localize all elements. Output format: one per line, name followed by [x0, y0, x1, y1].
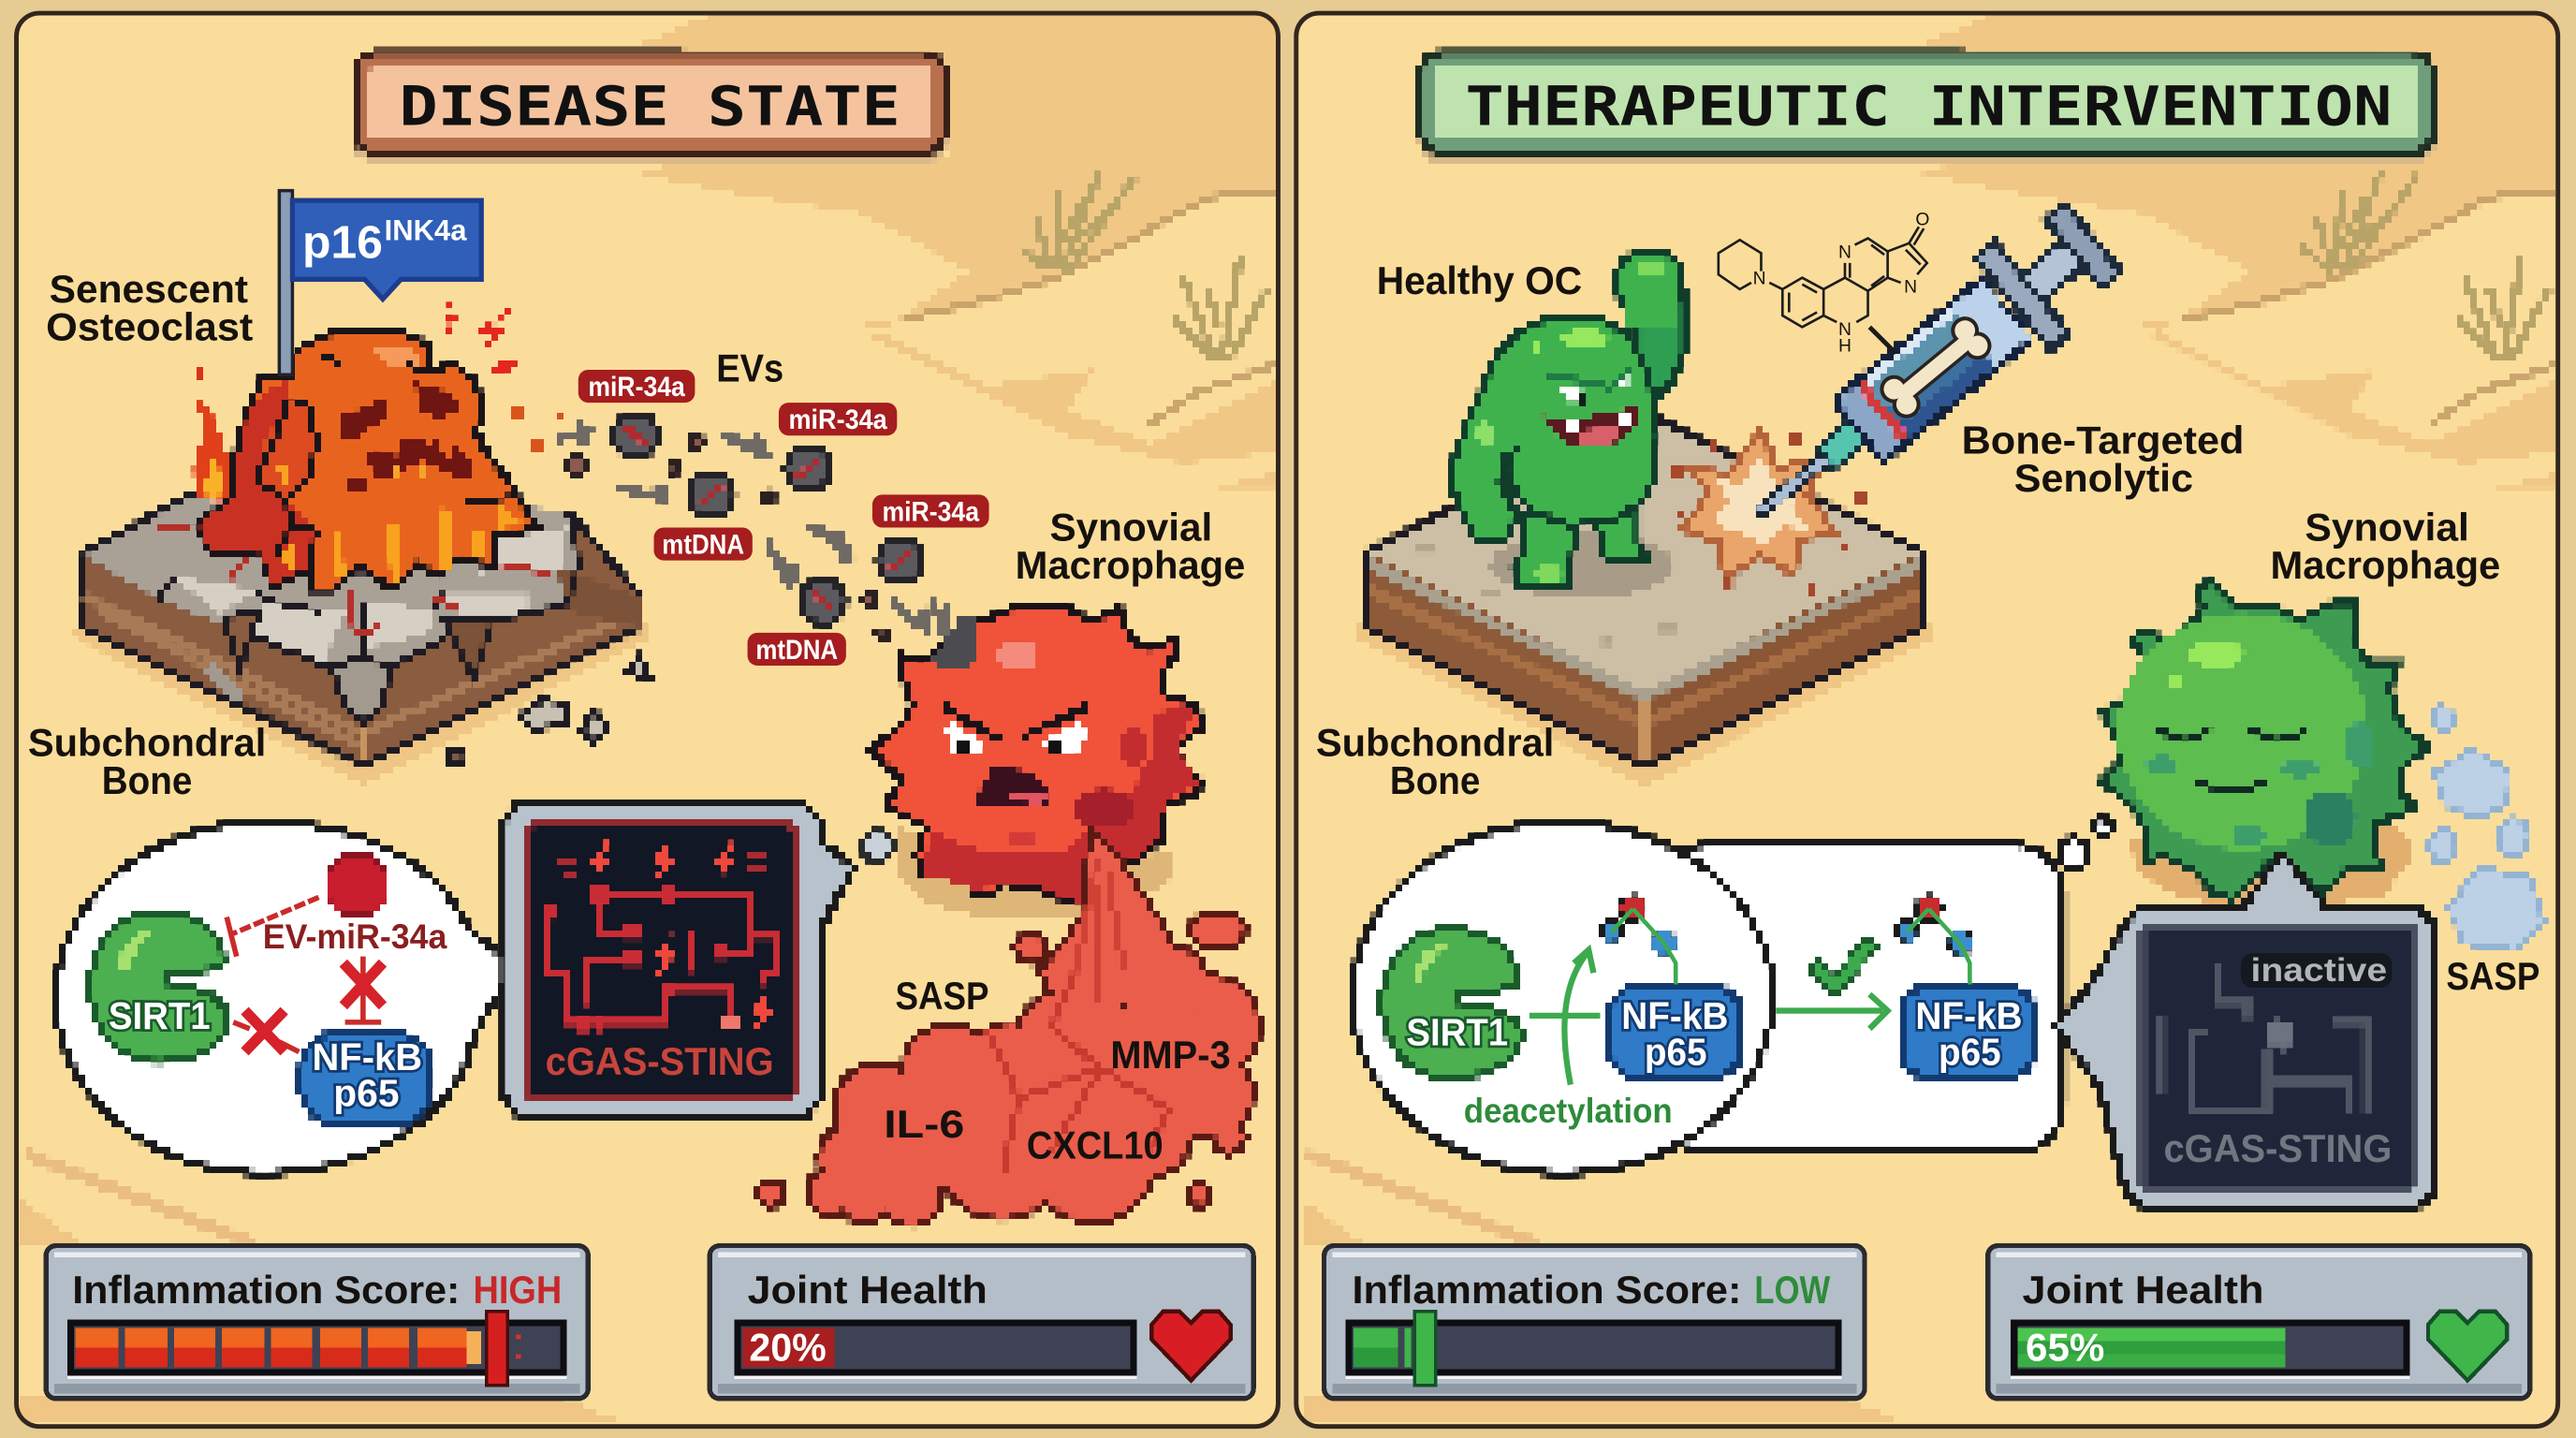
label: bone-targeted senolytic	[1962, 418, 2244, 500]
icon: EV-miR-34a stop sign	[329, 855, 386, 916]
label: senescent osteoclast: Senescent	[50, 267, 248, 311]
healthy osteoclast character	[1454, 255, 1684, 587]
deacetylation arrows	[1530, 950, 1888, 1085]
tag: mtDNA: mtDNA	[755, 635, 838, 666]
EV debris	[567, 435, 887, 639]
label: SASP: SASP	[896, 974, 989, 1018]
speech bubble: SIRT1 blocked	[56, 822, 516, 1173]
senescent osteoclast lava monster	[196, 330, 537, 590]
label: NF-kB p65 left: NF-kB	[1621, 994, 1728, 1037]
gauge: inflammation score high	[46, 1246, 588, 1399]
label: NF-kB p65: p65	[333, 1071, 399, 1114]
gauge value: 20%: 20%	[749, 1325, 827, 1369]
isometric subchondral bone, cracked	[74, 461, 651, 785]
label: deacetylation: deacetylation	[1464, 1092, 1673, 1130]
therapy labels	[1316, 74, 2539, 1369]
speech bubble: deacetylation	[1352, 822, 2063, 1173]
label: cGAS-STING: cGAS-STING	[546, 1039, 774, 1083]
cGAS-STING monitor: inactive	[2056, 853, 2433, 1210]
chemical structure of senolytic: N	[1904, 277, 1917, 297]
label: subchondral bone: Bone	[102, 758, 192, 802]
flame	[194, 368, 233, 503]
panel: therapeutic intervention	[1296, 13, 2558, 1427]
label: IL-6: IL-6	[884, 1102, 964, 1146]
label: subchondral bone	[28, 720, 266, 802]
label: synovial macrophage: Synovial	[1050, 506, 1212, 550]
label: subchondral bone: Subchondral	[28, 720, 266, 764]
gauge text: joint health: Joint Health	[748, 1268, 988, 1312]
label: SIRT1: SIRT1	[1406, 1010, 1508, 1053]
label: synovial macrophage	[2271, 506, 2500, 587]
label: subchondral bone	[1316, 720, 1554, 802]
panel frame: therapy	[1296, 13, 2558, 1427]
gauge text: inflammation high: HIGH	[473, 1268, 562, 1312]
label: healthy OC: Healthy OC	[1377, 258, 1582, 302]
label: SASP: SASP	[2446, 954, 2539, 998]
label: EVs: EVs	[716, 345, 783, 389]
icon: acetyl groups	[1601, 896, 1972, 956]
icon: NF-kB p65	[300, 1032, 432, 1125]
chemical structure of senolytic: N	[1838, 243, 1852, 263]
label: SIRT1: SIRT1	[109, 994, 211, 1037]
tag: miR-34a: miR-34a	[882, 496, 979, 527]
burst impact	[1673, 431, 1866, 594]
label: NF-kB p65 right: NF-kB	[1915, 994, 2023, 1037]
desert dunes	[1301, 17, 2556, 1423]
title banner shape	[1418, 50, 2437, 163]
gauge text: inflammation low: LOW	[1754, 1268, 1830, 1312]
flag: p16 INK4a	[279, 191, 481, 374]
lightning sparks	[440, 299, 520, 374]
flag: p16 INK4a: p16	[302, 218, 383, 269]
label: CXCL10: CXCL10	[1027, 1123, 1164, 1167]
label: senescent osteoclast	[46, 267, 253, 348]
chemical structure of senolytic: H	[1838, 337, 1852, 357]
SASP plume and cytokine cloud	[755, 837, 1257, 1223]
title banner shape	[352, 50, 948, 163]
gauge value: 65%: 65%	[2026, 1325, 2104, 1369]
label: NF-kB p65 left: p65	[1645, 1031, 1707, 1074]
label: bone-targeted senolytic: Bone-Targeted	[1962, 418, 2244, 462]
icon: NF-kB p65 activated	[1901, 986, 2036, 1078]
label: synovial macrophage: Macrophage	[2271, 543, 2500, 587]
label: synovial macrophage	[1016, 506, 1245, 587]
syringe	[1722, 192, 2130, 558]
gauge: inflammation score low	[1325, 1246, 1865, 1399]
SASP vapour clouds, faded	[2430, 707, 2543, 950]
label: NF-kB p65	[312, 1035, 422, 1114]
tag: miR-34a: miR-34a	[788, 404, 887, 435]
heading: therapeutic intervention: THERAPEUTIC INTERVENTION	[1466, 74, 2392, 138]
icon: SIRT1 enzyme	[91, 912, 227, 1062]
chemical structure of senolytic: N	[1753, 270, 1766, 289]
label: NF-kB p65 right: p65	[1939, 1031, 2001, 1074]
label: MMP-3: MMP-3	[1110, 1033, 1231, 1077]
flag: p16 INK4a: INK4a	[385, 213, 467, 246]
panel frame: disease	[17, 13, 1278, 1427]
label: senescent osteoclast: Osteoclast	[46, 304, 253, 348]
label: synovial macrophage: Synovial	[2305, 506, 2469, 550]
isometric subchondral bone, healthy	[1357, 411, 1934, 785]
label: NF-kB p65 right	[1915, 994, 2023, 1074]
extracellular vesicles	[614, 413, 922, 624]
rock debris	[448, 657, 651, 766]
label: NF-kB p65: NF-kB	[312, 1035, 422, 1078]
icon: check mark	[1808, 937, 1878, 998]
label: bone-targeted senolytic: Senolytic	[2014, 456, 2193, 500]
label: NF-kB p65 left	[1621, 994, 1728, 1074]
tag: inactive: inactive	[2250, 952, 2387, 989]
label: subchondral bone: Bone	[1390, 758, 1480, 802]
label: EV-miR-34a: EV-miR-34a	[263, 917, 447, 956]
icon: NF-kB p65	[1610, 986, 1741, 1078]
label: cGAS-STING faded: cGAS-STING	[2163, 1126, 2392, 1170]
panel: disease state	[17, 13, 1278, 1427]
gauge text: inflammation low: Inflammation Score:	[1352, 1268, 1741, 1312]
chemical structure of senolytic: O	[1915, 210, 1929, 229]
label: subchondral bone: Subchondral	[1316, 720, 1554, 764]
disease labels	[28, 74, 1245, 1369]
inhibition marks	[227, 897, 381, 1051]
thought dots	[2058, 818, 2111, 868]
tag: mtDNA: mtDNA	[662, 530, 744, 561]
gauge: joint health 20%	[710, 1246, 1253, 1399]
desert dunes	[20, 17, 1275, 1423]
acetyl bonds	[1612, 909, 1969, 985]
cGAS-STING monitor: active	[505, 802, 855, 1118]
chemical structure of senolytic	[1719, 210, 1929, 357]
heading: disease state: DISEASE STATE	[399, 74, 900, 138]
label: synovial macrophage: Macrophage	[1016, 543, 1245, 587]
thought dot	[862, 831, 892, 861]
tag: miR-34a: miR-34a	[588, 372, 685, 403]
flow arrows	[555, 419, 949, 648]
icon: red heart	[1151, 1312, 1231, 1381]
gauge text: joint health: Joint Health	[2023, 1268, 2264, 1312]
chemical structure of senolytic: N	[1838, 320, 1852, 340]
gauge text: inflammation high: Inflammation Score:	[72, 1268, 460, 1312]
icon: SIRT1 enzyme active	[1382, 929, 1521, 1078]
icon: red crosses	[245, 963, 383, 1051]
icon: bone on syringe	[1874, 311, 1998, 424]
synovial macrophage, angry	[871, 609, 1201, 920]
synovial macrophage, calm	[2101, 580, 2428, 903]
icon: green heart	[2428, 1312, 2507, 1381]
gauge: joint health 65%	[1988, 1246, 2530, 1399]
